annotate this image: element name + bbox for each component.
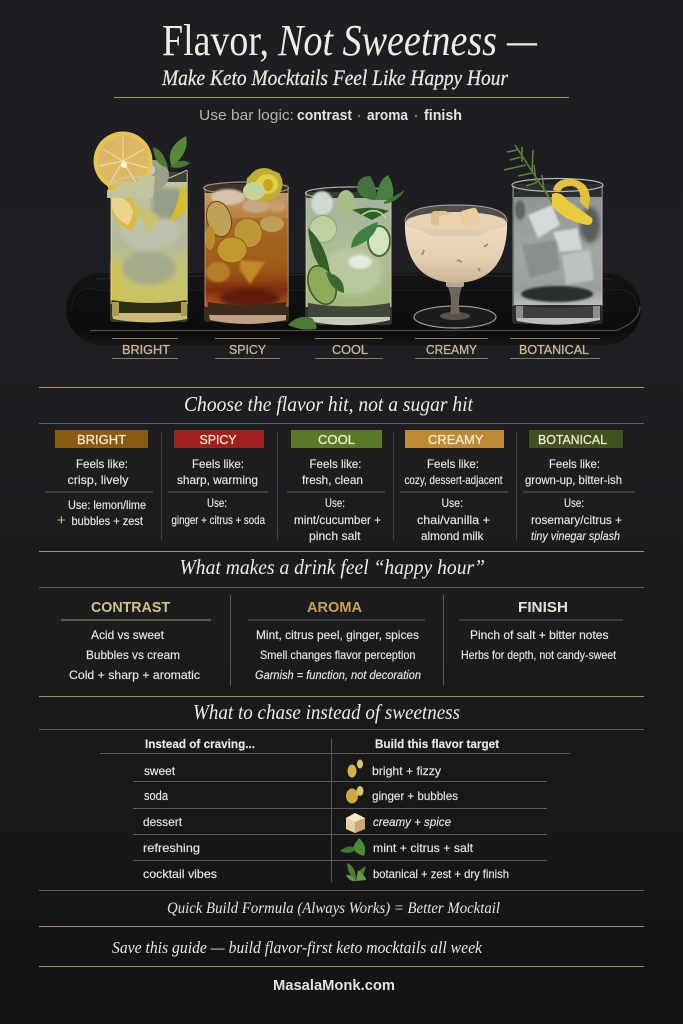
column: creamy	[400, 430, 508, 543]
tray labels	[112, 338, 600, 358]
row: refreshing	[143, 838, 474, 856]
flavor table	[45, 430, 635, 543]
column: bright	[45, 430, 153, 529]
column: spicy: sharp, warming	[177, 473, 258, 487]
row: dessert	[143, 813, 451, 833]
tagline: bar logic	[199, 107, 462, 124]
drink: creamy coupe	[405, 205, 507, 328]
panel: finish: Herbs for depth, not candy-sweet	[461, 648, 617, 662]
column: spicy: Feels like:	[192, 457, 244, 471]
title: —	[506, 16, 538, 65]
column: creamy: almond milk	[421, 529, 484, 543]
column: botanical	[523, 430, 635, 543]
panel: aroma: Garnish = function, not decoration	[255, 668, 421, 682]
drink: spicy ginger amber	[203, 168, 289, 324]
heading: flavor hit: Choose the flavor hit, not a sugar hit	[184, 392, 474, 416]
panel: aroma: Smell changes flavor perception	[260, 648, 416, 662]
column: bright: Feels like:	[76, 457, 128, 471]
panel: aroma	[248, 599, 425, 682]
row: refreshing: mint + citrus + salt	[373, 841, 474, 855]
title: Not Sweetness	[277, 16, 497, 65]
tagline: bar logic: Use bar logic:	[199, 107, 294, 124]
column: creamy: chai/vanilla +	[417, 513, 490, 527]
tray labels: CREAMY	[426, 342, 477, 357]
table header	[145, 737, 499, 751]
drink: bright lemon highball	[94, 132, 190, 322]
column: bright: crisp, lively	[68, 473, 128, 487]
column: creamy: Use:	[442, 496, 463, 510]
column: cool	[287, 430, 385, 543]
save call to action: Save this guide — build flavor-first keto mocktails all week	[112, 938, 482, 957]
drink: cool cucumber mint	[302, 175, 405, 325]
row: dessert: dessert	[143, 815, 183, 829]
icon: cream cube	[346, 813, 365, 833]
row: soda	[144, 786, 458, 804]
column: creamy: CREAMY	[428, 432, 484, 447]
title: Flavor,	[162, 16, 269, 65]
icon: small mint leaf on tray	[288, 317, 316, 330]
tray labels: SPICY	[229, 342, 266, 357]
icon: ginger	[346, 786, 364, 804]
tagline: bar logic: contrast	[297, 107, 352, 124]
icon: lemon drops	[348, 760, 363, 778]
row: sweet: sweet	[144, 764, 176, 778]
title	[162, 16, 538, 65]
column: spicy: ginger + citrus + soda	[172, 513, 265, 527]
panel: contrast: CONTRAST	[91, 599, 170, 616]
icon: botanical sprig	[346, 863, 366, 881]
column: spicy: SPICY	[200, 432, 237, 447]
tagline: bar logic: finish	[424, 107, 462, 124]
column: bright: +	[57, 512, 66, 529]
column: cool: mint/cucumber +	[294, 513, 381, 527]
column: bright: bubbles + zest	[72, 514, 144, 528]
row: dessert: creamy + spice	[373, 815, 451, 829]
row: sweet	[144, 760, 441, 778]
row: cocktail vibes	[143, 863, 509, 881]
panel: contrast	[61, 599, 211, 682]
panel: contrast: Cold + sharp + aromatic	[69, 668, 200, 682]
panel: contrast: Bubbles vs cream	[86, 648, 180, 662]
row: cocktail vibes: botanical + zest + dry finish	[373, 867, 509, 881]
column: creamy: cozy, dessert-adjacent	[404, 473, 503, 487]
heading: chase instead: What to chase instead of sweetness	[193, 700, 460, 724]
tray labels: BRIGHT	[122, 342, 170, 357]
table header: Build this flavor target	[375, 737, 499, 751]
icon: mint leaves	[340, 838, 365, 856]
panel: aroma: AROMA	[307, 599, 362, 616]
column: bright: Use: lemon/lime	[68, 498, 146, 512]
column: botanical: BOTANICAL	[538, 432, 607, 447]
panel: aroma: Mint, citrus peel, ginger, spices	[256, 628, 419, 642]
tray labels: BOTANICAL	[519, 342, 589, 357]
formula line: Quick Build Formula (Always Works) = Better Mocktail	[167, 900, 500, 917]
column: creamy: Feels like:	[427, 457, 479, 471]
column: cool: Feels like:	[310, 457, 362, 471]
column: botanical: Feels like:	[549, 457, 600, 471]
column: botanical: tiny vinegar splash	[531, 529, 620, 543]
column: cool: pinch salt	[309, 529, 361, 543]
tagline: bar logic: aroma	[367, 107, 409, 124]
tray labels: COOL	[332, 342, 368, 357]
panel: finish	[459, 599, 623, 662]
tray	[66, 273, 641, 345]
table header: Instead of craving...	[145, 737, 255, 751]
website footer: MasalaMonk.com	[273, 977, 395, 994]
column: botanical: grown-up, bitter-ish	[525, 473, 622, 487]
column: botanical: rosemary/citrus +	[531, 513, 622, 527]
column: spicy: Use:	[207, 496, 227, 510]
column: bright: BRIGHT	[77, 432, 126, 447]
row: refreshing: refreshing	[143, 841, 200, 855]
column: cool: Use:	[325, 496, 345, 510]
heading: happy hour: What makes a drink feel “happy hour”	[180, 555, 485, 579]
column: cool: COOL	[318, 432, 355, 447]
column: spicy	[168, 430, 268, 527]
drink: botanical rosemary tonic	[504, 145, 603, 325]
swap table	[100, 737, 570, 882]
row: sweet: bright + fizzy	[372, 764, 441, 778]
row: soda: soda	[144, 788, 169, 803]
row: cocktail vibes: cocktail vibes	[143, 867, 217, 881]
subtitle: Make Keto Mocktails Feel Like Happy Hour	[161, 65, 508, 90]
panel: finish: FINISH	[518, 599, 568, 616]
row: soda: ginger + bubbles	[372, 789, 458, 803]
panel: finish: Pinch of salt + bitter notes	[470, 628, 608, 642]
column: botanical: Use:	[564, 496, 584, 510]
panel: contrast: Acid vs sweet	[91, 628, 165, 642]
column: cool: fresh, clean	[302, 473, 363, 487]
